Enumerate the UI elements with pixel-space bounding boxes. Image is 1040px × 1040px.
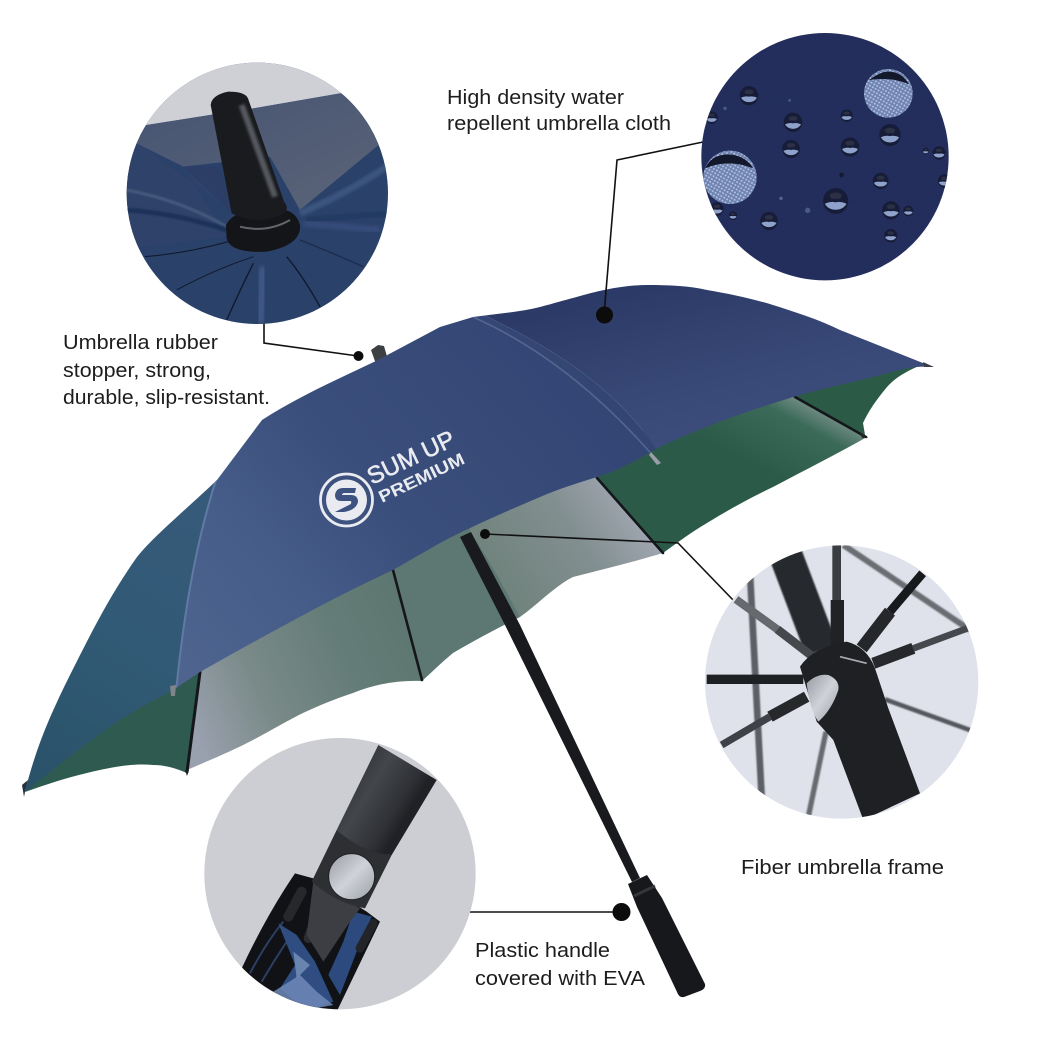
label: rubber stopper xyxy=(63,331,270,409)
label: umbrella cloth: repellent umbrella cloth xyxy=(447,112,671,135)
plastic tips xyxy=(288,892,373,948)
sky xyxy=(146,62,342,126)
label: handle: Plastic handle xyxy=(475,939,610,962)
canopy center panel xyxy=(177,316,656,688)
detail circle: fiber frame xyxy=(700,540,987,827)
logo: Sum Up Premium xyxy=(320,426,468,526)
underside far left green panel xyxy=(25,650,200,792)
callout leader: umbrella cloth xyxy=(596,142,703,324)
logo wordmark: SUM UP xyxy=(363,426,459,490)
large droplets xyxy=(703,69,913,204)
canopy left panel xyxy=(25,482,216,792)
umbrella underside xyxy=(25,365,921,792)
label: fiber frame: Fiber umbrella frame xyxy=(741,856,944,879)
umbrella top stopper xyxy=(371,345,388,364)
underside center panel xyxy=(393,510,520,681)
rear panel xyxy=(127,93,397,210)
label: rubber stopper: stopper, strong, xyxy=(63,359,211,382)
background ribs xyxy=(750,540,972,817)
small droplets xyxy=(706,86,951,242)
label: handle: covered with EVA xyxy=(475,967,645,990)
latch collar xyxy=(312,830,392,908)
silver button xyxy=(329,854,375,900)
stopper collar xyxy=(226,209,300,252)
canopy tips xyxy=(649,452,661,465)
label: umbrella cloth: High density water xyxy=(447,86,624,109)
ribs xyxy=(187,397,866,772)
umbrella shaft xyxy=(460,532,640,882)
silver clasp xyxy=(807,675,839,722)
underside left silver panel xyxy=(187,548,422,770)
label: umbrella cloth xyxy=(447,86,671,135)
label: rubber stopper: durable, slip-resistant. xyxy=(63,386,270,409)
stopper body xyxy=(211,92,287,220)
canopy right panel xyxy=(485,285,924,449)
logo badge xyxy=(320,474,372,526)
folded canopy xyxy=(242,873,380,1012)
underside right green panel xyxy=(590,376,867,553)
detail circle: rubber stopper xyxy=(126,62,388,324)
logo subtitle: PREMIUM xyxy=(376,449,468,507)
underside far right green panel xyxy=(795,365,921,435)
label: handle xyxy=(475,939,645,990)
central hub xyxy=(800,642,920,820)
lower shaft xyxy=(307,882,360,962)
detail circle: handle latch xyxy=(200,735,480,1015)
canopy folds xyxy=(120,143,390,323)
handle tube xyxy=(337,745,437,855)
label: rubber stopper: Umbrella rubber xyxy=(63,331,218,354)
detail circle: water repellent cloth xyxy=(695,25,955,285)
umbrella handle xyxy=(628,875,705,997)
callout leader: handle xyxy=(470,903,630,921)
callout leader: rubber stopper xyxy=(264,322,364,361)
spokes xyxy=(707,545,967,745)
underside center silver panel xyxy=(470,450,663,617)
callout leader: fiber frame xyxy=(480,529,735,602)
umbrella canopy xyxy=(22,285,934,797)
